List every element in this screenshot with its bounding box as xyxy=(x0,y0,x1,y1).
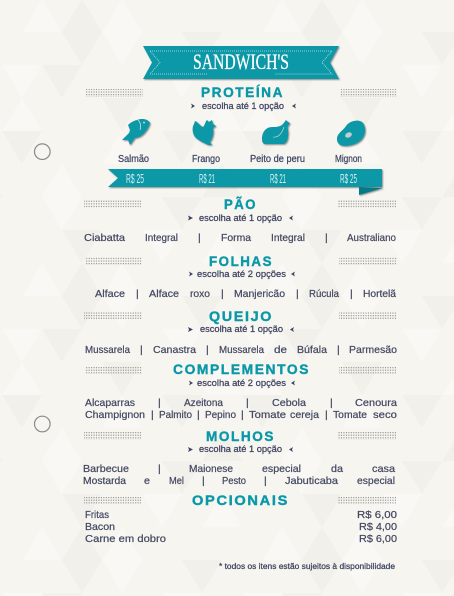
items: de xyxy=(274,344,287,356)
option note: escolha até 1 opção xyxy=(199,213,282,224)
items line 2: Tomate xyxy=(333,409,367,421)
items line 2: | xyxy=(197,409,200,421)
items line 1 xyxy=(85,397,397,409)
section: folhas xyxy=(85,253,397,300)
option note: escolha até 2 opções xyxy=(197,378,286,389)
product labels: Mignon xyxy=(335,154,362,165)
punched hole: top xyxy=(34,144,50,160)
punched hole: bottom xyxy=(34,416,50,432)
items line 2: | xyxy=(325,409,328,421)
items: | xyxy=(221,288,224,300)
items line 1: Cebola xyxy=(272,397,306,409)
section: proteína xyxy=(86,84,397,195)
section: pão xyxy=(84,195,396,244)
section: queijo xyxy=(84,308,397,356)
price ribbon: R$ 21 xyxy=(270,171,286,186)
section: molhos xyxy=(83,428,396,487)
heading: COMPLEMENTOS xyxy=(173,361,310,377)
items line 2: | xyxy=(264,475,267,487)
items line 1: Cenoura xyxy=(355,397,397,409)
icon: steak xyxy=(337,121,365,146)
items: Ciabatta xyxy=(84,232,125,244)
extras list: Fritas xyxy=(85,509,109,521)
items: Integral xyxy=(271,232,305,244)
heading: PÃO xyxy=(224,195,257,212)
product labels xyxy=(118,154,362,165)
extras list: R$ 6,00 xyxy=(359,533,397,545)
option note: escolha até 1 opção xyxy=(200,324,283,335)
items line 1: | xyxy=(158,463,161,475)
items line 2: | xyxy=(241,409,244,421)
items line 2: e xyxy=(144,475,150,487)
items line 2: Mostarda xyxy=(83,475,126,487)
items: Australiano xyxy=(347,232,396,244)
heading: PROTEÍNA xyxy=(201,84,284,100)
items: | xyxy=(325,232,328,244)
product labels: Peito de peru xyxy=(250,154,305,165)
items: | xyxy=(296,288,299,300)
items line 1: casa xyxy=(372,463,395,475)
footnote: * todos os itens estão sujeitos à disponibilidade xyxy=(219,561,395,571)
items line 2: Pesto xyxy=(222,475,246,487)
items line 2: Jabuticaba xyxy=(285,475,338,487)
option note: escolha até 2 opções xyxy=(197,269,286,280)
title banner xyxy=(143,46,339,79)
icon: fish xyxy=(122,119,150,145)
title text: SANDWICH'S xyxy=(193,49,289,74)
items: | xyxy=(350,288,353,300)
items line 2: Palmito xyxy=(159,409,192,421)
items line 2: Champignon xyxy=(85,409,145,421)
items line 2: | xyxy=(151,409,154,421)
items line 1: Barbecue xyxy=(83,463,129,475)
items line 2 xyxy=(85,409,397,421)
price ribbon: R$ 21 xyxy=(199,171,215,186)
items: Canastra xyxy=(153,344,196,356)
items line 2: especial xyxy=(357,475,395,487)
section: opcionais xyxy=(84,492,397,545)
dotted ornament right xyxy=(340,89,397,97)
heading: FOLHAS xyxy=(209,253,273,269)
product labels: Salmão xyxy=(118,154,149,165)
items line 1: | xyxy=(246,397,249,409)
items xyxy=(95,288,396,300)
items: Integral xyxy=(145,232,178,244)
items: Forma xyxy=(221,232,251,244)
items line 2: Tomate xyxy=(249,409,286,421)
extras list xyxy=(85,509,397,545)
items: Rúcula xyxy=(309,288,339,300)
items xyxy=(85,344,397,356)
items: Alface xyxy=(95,288,125,300)
items line 2: seco xyxy=(373,409,397,421)
option note: escolha até 1 opção xyxy=(199,444,282,455)
items line 1: Alcaparras xyxy=(85,397,135,409)
heading: MOLHOS xyxy=(206,428,275,444)
dotted ornament left xyxy=(86,89,143,97)
price ribbon: R$ 25 xyxy=(340,171,357,186)
items: | xyxy=(140,344,143,356)
items: roxo xyxy=(190,288,210,300)
items line 1 xyxy=(83,463,395,475)
items line 1: | xyxy=(330,397,333,409)
items: | xyxy=(337,344,340,356)
items line 1: da xyxy=(331,463,343,475)
items line 2 xyxy=(83,475,395,487)
items line 2: Pepino xyxy=(205,409,236,421)
items: Manjericão xyxy=(234,288,285,300)
items line 1: especial xyxy=(262,463,301,475)
items: Búfala xyxy=(297,344,327,356)
icon: chicken xyxy=(193,120,216,145)
icon: turkey xyxy=(262,120,290,144)
price ribbon xyxy=(108,169,383,195)
items: | xyxy=(206,344,209,356)
items: | xyxy=(198,232,201,244)
items: Alface xyxy=(149,288,179,300)
items: | xyxy=(136,288,139,300)
items line 2: cereja xyxy=(290,409,319,421)
extras list: R$ 4,00 xyxy=(359,521,397,533)
items: Parmesão xyxy=(349,344,397,356)
product labels: Frango xyxy=(192,154,220,165)
extras list: R$ 6,00 xyxy=(357,509,397,521)
items line 2: Mel xyxy=(169,475,184,487)
items line 2: | xyxy=(202,475,205,487)
heading: OPCIONAIS xyxy=(192,492,289,508)
items: Mussarela xyxy=(219,344,264,356)
items xyxy=(84,232,396,244)
extras list: Bacon xyxy=(85,521,115,533)
heading: QUEIJO xyxy=(209,308,273,324)
items line 1: Maionese xyxy=(189,463,233,475)
price ribbon: R$ 25 xyxy=(126,171,144,186)
extras list: Carne em dobro xyxy=(85,533,166,545)
items line 1: Azeitona xyxy=(184,397,223,409)
section: complementos xyxy=(85,361,397,421)
items line 1: | xyxy=(158,397,161,409)
items: Mussarela xyxy=(85,344,130,356)
option note: escolha até 1 opção xyxy=(202,101,284,112)
items: Hortelã xyxy=(363,288,396,300)
